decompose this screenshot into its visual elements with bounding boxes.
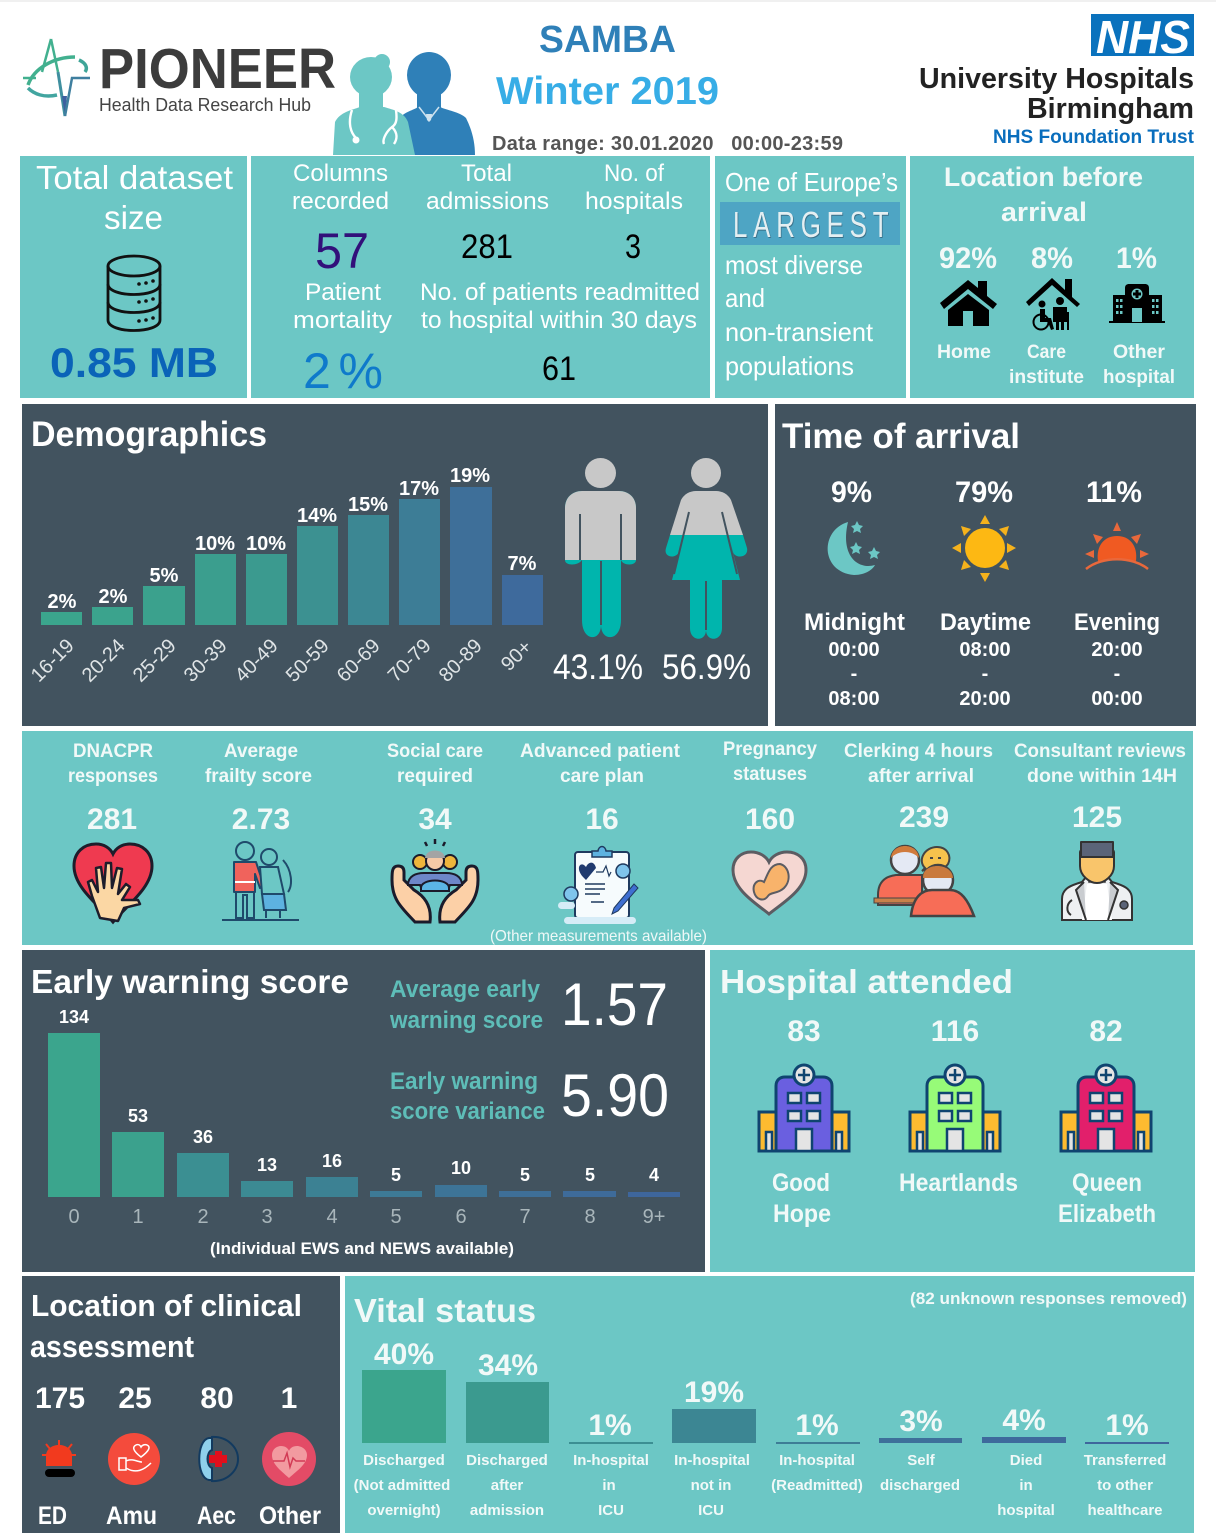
- midnight: Midnight: [804, 609, 905, 636]
- heading: Early warning score: [31, 963, 349, 1000]
- consultant reviews within 14H: done within 14H: [1027, 766, 1177, 787]
- consultant reviews within 14H: [1014, 741, 1186, 920]
- bar chart: age groups: [27, 465, 543, 687]
- bar chart: score distribution: [48, 1007, 680, 1228]
- panel: Europe's largest: [715, 156, 906, 398]
- DNACPR responses: 281: [87, 803, 137, 836]
- bar chart: outcomes: 1%: [588, 1409, 632, 1442]
- organisation name: [919, 63, 1195, 148]
- Heartlands: Heartlands: [899, 1169, 1018, 1197]
- bar chart: outcomes: 19%: [684, 1376, 744, 1409]
- bar labels: ICU: [698, 1502, 724, 1519]
- bar labels: [354, 1452, 1166, 1519]
- bar chart: score distribution: 13: [257, 1155, 277, 1175]
- total admissions: Total: [461, 160, 512, 187]
- banner: largest: LARGEST: [733, 205, 894, 245]
- logo wordmark: PIONEER: [99, 37, 336, 101]
- readmitted patients: No. of patients readmitted: [420, 279, 700, 306]
- evening: 11%: [1086, 476, 1142, 509]
- daytime: 79%: [955, 476, 1013, 509]
- bar chart: score distribution: 5: [391, 1165, 401, 1185]
- panel: key numbers: [251, 156, 710, 399]
- care institute: [1009, 242, 1084, 388]
- social care required: required: [397, 766, 473, 787]
- bar chart: outcomes: 4%: [1002, 1404, 1046, 1437]
- bar labels: Self: [907, 1452, 936, 1469]
- Other: [259, 1382, 321, 1530]
- bar chart: age groups: 2%: [48, 591, 77, 613]
- total admissions: 281: [461, 228, 513, 266]
- logo tagline: Health Data Research Hub: [99, 95, 311, 115]
- description: non-transient: [725, 317, 874, 347]
- organisation name: NHS Foundation Trust: [993, 127, 1195, 148]
- bar chart: age groups: 19%: [450, 465, 490, 487]
- social care required: [387, 741, 483, 922]
- daytime: 08:00: [959, 639, 1011, 661]
- Amu: [106, 1382, 160, 1530]
- bar chart: score distribution: 53: [128, 1106, 148, 1126]
- bar chart: score distribution: 10: [451, 1158, 471, 1178]
- description: and: [725, 283, 765, 313]
- heading: Hospital attended: [720, 963, 1013, 1000]
- ED: [35, 1382, 85, 1530]
- panel: early warning score: [22, 950, 705, 1272]
- bar labels: Transferred: [1084, 1452, 1166, 1469]
- readmitted patients: [420, 279, 700, 388]
- Good Hope: Good: [772, 1169, 830, 1197]
- midnight: 08:00: [828, 688, 880, 710]
- description: [725, 250, 874, 381]
- pregnancy statuses: 160: [745, 803, 795, 836]
- male and female percentages: 56.9%: [662, 648, 751, 687]
- bar chart: age groups: 7%: [508, 553, 537, 575]
- home: Home: [937, 342, 991, 363]
- patient mortality: [293, 279, 392, 399]
- evening: Evening: [1074, 609, 1160, 636]
- panel: vital status: [345, 1276, 1194, 1533]
- heading: assessment: [30, 1329, 194, 1364]
- Queen Elizabeth: 82: [1089, 1015, 1123, 1048]
- male and female percentages: 43.1%: [553, 648, 643, 687]
- bar chart: age groups: 5%: [150, 565, 179, 587]
- bar chart: age groups: 70-79: [384, 635, 436, 687]
- columns recorded: [292, 160, 389, 279]
- bar labels: after: [491, 1477, 523, 1494]
- description: most diverse: [725, 250, 863, 280]
- bar chart: age groups: 50-59: [282, 635, 334, 687]
- value: 0.85 MB: [50, 339, 218, 386]
- description: populations: [725, 351, 854, 381]
- total admissions: [426, 160, 549, 266]
- midnight: [804, 476, 905, 710]
- bar labels: Died: [1010, 1452, 1042, 1469]
- heading: [944, 162, 1143, 227]
- Queen Elizabeth: [1058, 1015, 1156, 1228]
- panel: location before arrival: [910, 156, 1194, 398]
- bar labels: Discharged: [466, 1452, 548, 1469]
- bar chart: score distribution: 36: [193, 1127, 213, 1147]
- Good Hope: Hope: [773, 1200, 831, 1228]
- bar chart: score distribution: 5: [520, 1165, 530, 1185]
- DNACPR responses: DNACPR: [73, 741, 153, 762]
- average frailty score: frailty score: [205, 766, 312, 787]
- advanced patient care plan: Advanced patient: [520, 741, 681, 762]
- heading: Demographics: [31, 415, 267, 454]
- note: (Individual EWS and NEWS available): [210, 1239, 514, 1258]
- readmitted patients: to hospital within 30 days: [421, 307, 697, 334]
- advanced patient care plan: 16: [585, 803, 619, 836]
- home: 92%: [939, 242, 997, 275]
- evening: 00:00: [1091, 688, 1143, 710]
- Other: Other: [259, 1502, 321, 1530]
- bar labels: Discharged: [363, 1452, 445, 1469]
- bar chart: age groups: 15%: [348, 494, 388, 516]
- bar labels: In-hospital: [674, 1452, 750, 1469]
- average early warning score: [389, 971, 668, 1038]
- bar chart: age groups: 60-69: [333, 635, 385, 687]
- bar labels: ICU: [598, 1502, 624, 1519]
- bar chart: outcomes: 34%: [478, 1349, 538, 1382]
- bar chart: outcomes: [362, 1338, 1169, 1444]
- average frailty score: [205, 741, 312, 920]
- advanced patient care plan: care plan: [560, 766, 644, 787]
- other hospital: hospital: [1103, 367, 1175, 388]
- evening: 20:00: [1091, 639, 1143, 661]
- bar chart: age groups: 10%: [246, 533, 286, 555]
- patient mortality: mortality: [293, 307, 392, 334]
- bar chart: age groups: 14%: [297, 505, 337, 527]
- early warning score variance: score variance: [390, 1098, 545, 1125]
- Queen Elizabeth: Queen: [1072, 1169, 1142, 1197]
- midnight: 00:00: [828, 639, 880, 661]
- bar chart: score distribution: 5: [390, 1206, 402, 1228]
- care institute: 8%: [1031, 242, 1073, 275]
- DNACPR responses: [68, 741, 158, 922]
- heading: [36, 159, 233, 236]
- bar labels: hospital: [997, 1502, 1055, 1519]
- columns recorded: 57: [315, 223, 369, 279]
- Aec: [197, 1382, 238, 1530]
- care institute: institute: [1009, 367, 1084, 388]
- other hospital: Other: [1113, 342, 1166, 363]
- average frailty score: 2.73: [232, 803, 290, 836]
- heading: size: [104, 199, 163, 236]
- average early warning score: Average early: [390, 976, 541, 1003]
- evening: -: [1114, 663, 1120, 685]
- average frailty score: Average: [224, 741, 298, 762]
- number of hospitals: 3: [625, 228, 641, 266]
- Queen Elizabeth: Elizabeth: [1058, 1200, 1156, 1228]
- organisation name: Birmingham: [1027, 93, 1194, 125]
- bar chart: score distribution: 4: [649, 1165, 659, 1185]
- bar labels: (Readmitted): [771, 1477, 863, 1494]
- bar chart: score distribution: 4: [326, 1206, 338, 1228]
- heading: Location before: [944, 162, 1143, 192]
- bar chart: score distribution: 3: [261, 1206, 273, 1228]
- daytime: [940, 476, 1031, 710]
- bar labels: In-hospital: [779, 1452, 855, 1469]
- footnote: (Other measurements available): [490, 928, 707, 945]
- bar labels: In-hospital: [573, 1452, 649, 1469]
- Other: 1: [281, 1382, 297, 1415]
- bar chart: age groups: 2%: [99, 586, 128, 608]
- number of hospitals: [585, 160, 683, 266]
- DNACPR responses: responses: [68, 766, 158, 787]
- bar chart: age groups: 90+: [497, 636, 537, 676]
- logo: PIONEER: [23, 37, 336, 117]
- panel: Europe's largest: One of Europe’s: [725, 167, 898, 197]
- columns recorded: Columns: [293, 160, 388, 187]
- organisation name: University Hospitals: [919, 63, 1194, 95]
- icon: clinicians: [333, 52, 475, 155]
- number of hospitals: No. of: [604, 160, 664, 187]
- bar chart: outcomes: 40%: [374, 1338, 434, 1371]
- social care required: 34: [418, 803, 452, 836]
- heading: Location of clinical: [31, 1288, 302, 1323]
- daytime: 20:00: [959, 688, 1011, 710]
- heading: [30, 1288, 302, 1364]
- bar labels: admission: [470, 1502, 544, 1519]
- columns recorded: recorded: [292, 188, 389, 215]
- Amu: 25: [118, 1382, 152, 1415]
- subtitle: Winter 2019: [496, 70, 719, 113]
- midnight: 9%: [831, 476, 872, 509]
- average early warning score: warning score: [389, 1007, 543, 1034]
- bar chart: score distribution: 16: [322, 1151, 342, 1171]
- logo: NHS: NHS: [1096, 11, 1190, 63]
- male and female percentages: [553, 648, 751, 687]
- heading: Time of arrival: [782, 417, 1020, 456]
- patient mortality: Patient: [305, 279, 381, 306]
- bar chart: score distribution: 134: [59, 1007, 89, 1027]
- care institute: Care: [1027, 342, 1066, 363]
- consultant reviews within 14H: 125: [1072, 801, 1122, 834]
- note: (82 unknown responses removed): [910, 1289, 1187, 1308]
- Amu: Amu: [106, 1502, 157, 1530]
- evening: [1074, 476, 1160, 710]
- ED: 175: [35, 1382, 85, 1415]
- bar labels: discharged: [880, 1477, 960, 1494]
- total admissions: admissions: [426, 188, 549, 215]
- readmitted patients: 61: [542, 350, 576, 388]
- heading: Total dataset: [36, 159, 233, 196]
- icon: female figure: [666, 458, 747, 639]
- bar chart: score distribution: 0: [68, 1206, 80, 1228]
- bar chart: outcomes: 3%: [899, 1405, 943, 1438]
- early warning score variance: Early warning: [390, 1068, 538, 1095]
- bar chart: age groups: 40-49: [231, 635, 283, 687]
- bar chart: score distribution: 5: [585, 1165, 595, 1185]
- bar chart: age groups: 25-29: [129, 635, 181, 687]
- early warning score variance: 5.90: [561, 1062, 669, 1129]
- ED: ED: [38, 1502, 67, 1530]
- other hospital: 1%: [1116, 242, 1157, 275]
- bar chart: age groups: 20-24: [78, 635, 130, 687]
- panel: hospital attended: [710, 950, 1195, 1272]
- consultant reviews within 14H: Consultant reviews: [1014, 741, 1186, 762]
- bar chart: score distribution: 6: [455, 1206, 467, 1228]
- Aec: Aec: [197, 1502, 236, 1530]
- bar labels: not in: [691, 1477, 731, 1494]
- icon: male figure: [565, 458, 636, 637]
- bar labels: to other: [1097, 1477, 1153, 1494]
- bar chart: outcomes: 1%: [795, 1409, 839, 1442]
- clerking 4 hours after arrival: [844, 741, 993, 916]
- bar labels: (Not admitted: [354, 1477, 450, 1494]
- Heartlands: 116: [931, 1015, 979, 1048]
- bar chart: score distribution: 9+: [643, 1206, 665, 1228]
- bar labels: healthcare: [1087, 1502, 1163, 1519]
- panel: demographics: [22, 404, 768, 726]
- bar chart: age groups: 16-19: [27, 635, 79, 687]
- panel: time of arrival: [775, 404, 1196, 726]
- pregnancy statuses: statuses: [733, 764, 807, 785]
- early warning score variance: [390, 1062, 669, 1129]
- bar labels: in: [1019, 1477, 1033, 1494]
- icon: database: [108, 256, 160, 330]
- pregnancy statuses: [723, 739, 817, 914]
- daytime: Daytime: [940, 609, 1031, 636]
- bar chart: outcomes: 1%: [1105, 1409, 1149, 1442]
- home: [937, 242, 997, 363]
- midnight: -: [851, 663, 857, 685]
- clerking 4 hours after arrival: 239: [899, 801, 949, 834]
- patient mortality: 2 %: [303, 343, 383, 399]
- advanced patient care plan: [520, 741, 681, 924]
- title: SAMBA: [539, 19, 676, 61]
- heading: Vital status: [354, 1292, 536, 1329]
- Good Hope: [759, 1015, 849, 1228]
- bar chart: age groups: 10%: [195, 533, 235, 555]
- social care required: Social care: [387, 741, 483, 762]
- Heartlands: [899, 1015, 1018, 1197]
- bar chart: age groups: 80-89: [435, 635, 487, 687]
- clerking 4 hours after arrival: Clerking 4 hours: [844, 741, 993, 762]
- bar chart: score distribution: 2: [197, 1206, 209, 1228]
- bar chart: age groups: 30-39: [180, 635, 232, 687]
- header: [23, 11, 1195, 155]
- Good Hope: 83: [787, 1015, 821, 1048]
- bar labels: in: [602, 1477, 616, 1494]
- pregnancy statuses: Pregnancy: [723, 739, 817, 760]
- panel: clinical measurements: [22, 731, 1193, 945]
- bar chart: score distribution: 8: [584, 1206, 596, 1228]
- Aec: 80: [200, 1382, 234, 1415]
- number of hospitals: hospitals: [585, 188, 683, 215]
- daytime: -: [982, 663, 988, 685]
- bar labels: overnight): [367, 1502, 441, 1519]
- panel: total dataset size: [20, 156, 247, 398]
- bar chart: score distribution: 1: [132, 1206, 144, 1228]
- heading: arrival: [1001, 197, 1087, 227]
- bar chart: age groups: 17%: [399, 478, 439, 500]
- panel: location of clinical assessment: [22, 1276, 340, 1533]
- data range: Data range: 30.01.2020 00:00-23:59: [492, 133, 843, 155]
- bar chart: score distribution: 7: [519, 1206, 531, 1228]
- average early warning score: 1.57: [561, 971, 668, 1038]
- other hospital: [1103, 242, 1175, 388]
- clerking 4 hours after arrival: after arrival: [868, 766, 974, 787]
